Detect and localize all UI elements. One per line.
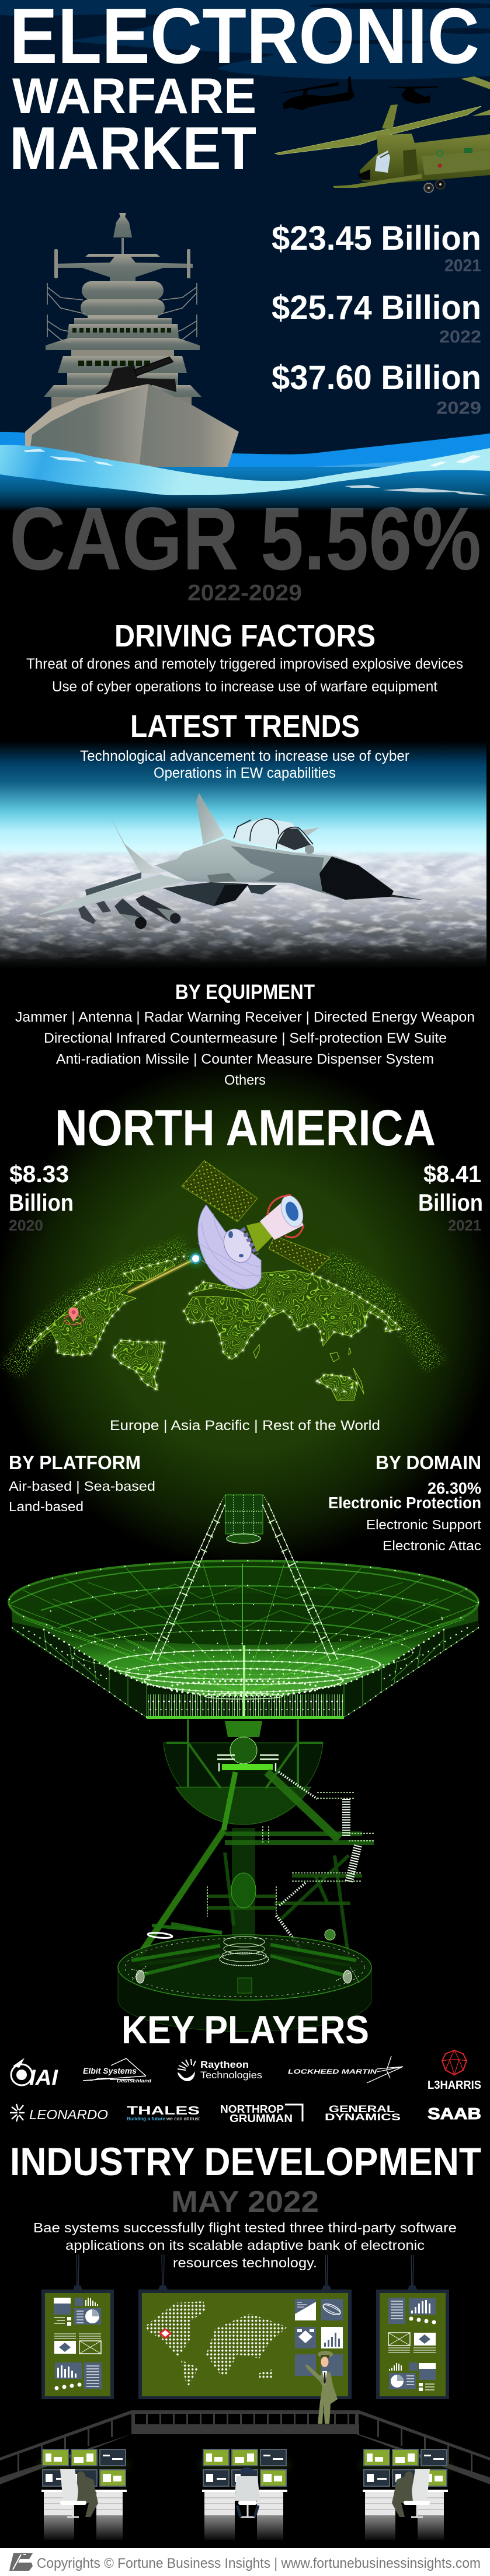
- logo: IAI: IAI: [29, 2065, 58, 2089]
- tower frame: [136, 1772, 374, 1965]
- by equipment: Jammer | Antenna | Radar Warning Receiver | Directed Energy Weapon: [15, 1009, 475, 1025]
- wing: [40, 875, 187, 915]
- by domain: [328, 1452, 482, 1553]
- market size figures: 2021: [444, 256, 481, 275]
- sea: lighter blue band: [225, 461, 412, 490]
- market size figures: $25.74 Billion: [272, 289, 481, 327]
- logo: Thales: Building a future: [127, 2116, 166, 2121]
- by equipment: BY EQUIPMENT: [175, 981, 315, 1004]
- centre workstation: [198, 2449, 291, 2540]
- footer bar: [0, 2548, 490, 2576]
- industry development heading: [10, 2140, 481, 2219]
- north america heading: NORTH AMERICA: [55, 1100, 436, 1156]
- location pin: [64, 1308, 83, 1324]
- logo: Raytheon Technologies: Technologies: [200, 2070, 262, 2081]
- clouds: [0, 0, 490, 79]
- satellite: [182, 1161, 330, 1289]
- north america 2020 value: Billion: [9, 1189, 74, 1216]
- panel: sky and fighter jet: [0, 735, 490, 969]
- logo: Leonardo: [10, 2104, 108, 2122]
- sea: deep blue: [0, 432, 490, 484]
- logo: Elbit Systems: Deutschland: [117, 2078, 152, 2084]
- by domain: Electronic Support: [366, 1517, 482, 1532]
- industry development text: applications on its scalable adaptive bank of electronic: [65, 2238, 425, 2253]
- foreground helicopter silhouettes: [276, 76, 438, 110]
- north america 2020 value: $8.33: [9, 1161, 69, 1187]
- centre operator: [234, 2467, 260, 2517]
- stairs: [276, 1772, 358, 1947]
- ground base disc: [118, 1925, 371, 2032]
- footer logo: [9, 2553, 33, 2571]
- market size figures: 2029: [436, 399, 481, 418]
- fighter jet: [40, 793, 426, 929]
- by platform: [9, 1452, 155, 1514]
- latest trends: Operations in EW capabilities: [154, 765, 336, 781]
- driving factors: DRIVING FACTORS: [114, 618, 376, 653]
- cloud texture: [0, 852, 486, 963]
- logo row one: [11, 2050, 481, 2092]
- driving factors: [26, 618, 463, 695]
- logo: L3Harris: [428, 2050, 481, 2092]
- north america 2021 value: [418, 1161, 483, 1234]
- by platform: BY PLATFORM: [9, 1452, 141, 1473]
- control room: [0, 2255, 490, 2540]
- north america 2021 value: Billion: [418, 1189, 483, 1216]
- logo: Thales: THALES: [127, 2105, 200, 2117]
- by domain: 26.30%: [428, 1479, 481, 1497]
- logo: L3Harris: L3HARRIS: [428, 2079, 481, 2092]
- deck gun: [91, 357, 176, 399]
- foam flecks: [23, 449, 490, 495]
- underwing missiles: [78, 895, 182, 929]
- world contour map: [30, 1260, 402, 1400]
- market size figures: $23.45 Billion: [272, 219, 481, 257]
- left workstation: [37, 2449, 131, 2540]
- logo: Northrop Grumman: NORTHROP: [220, 2103, 284, 2115]
- logo: General Dynamics: GENERAL: [329, 2103, 395, 2114]
- by domain: Electronic Protection: [328, 1494, 481, 1512]
- logo: Elbit Systems: [83, 2058, 152, 2084]
- market size figures: $37.60 Billion: [272, 359, 481, 397]
- panel: regional map glow: [0, 1056, 490, 1558]
- rim and face nodes: [9, 1561, 478, 1717]
- title: [9, 0, 479, 183]
- right workstation: [359, 2449, 452, 2540]
- other regions: Europe | Asia Pacific | Rest of the World: [110, 1418, 380, 1434]
- logo: Northrop Grumman: GRUMMAN: [230, 2113, 293, 2124]
- sea: pale foam wave: [0, 445, 490, 495]
- latest trends: [80, 709, 409, 781]
- particle scatter: [0, 1233, 450, 1381]
- sea: lower fade into black: [0, 467, 490, 512]
- title: MARKET: [9, 115, 256, 183]
- industry development heading: MAY 2022: [171, 2185, 319, 2219]
- driving factors: Use of cyber operations to increase use of warfare equipment: [52, 679, 437, 695]
- glowing city lights: [30, 1256, 402, 1392]
- logo: Northrop Grumman: [220, 2103, 303, 2124]
- title: WARFARE: [12, 68, 256, 124]
- officer presenting: [305, 2351, 338, 2424]
- helicopter: olive transport: [274, 76, 490, 193]
- by equipment: Anti-radiation Missile | Counter Measure Dispenser System: [56, 1051, 434, 1067]
- north america 2020 value: [9, 1161, 74, 1234]
- by domain: Electronic Attac: [383, 1538, 481, 1553]
- north america 2020 value: 2020: [9, 1217, 43, 1234]
- by platform: Air-based | Sea-based: [9, 1479, 155, 1494]
- signal beam: [128, 1259, 196, 1292]
- CAGR headline: 2022-2029: [187, 581, 302, 606]
- balcony railing: [0, 2410, 490, 2484]
- hanging screen mounts: [77, 2255, 413, 2286]
- logo: Lockheed Martin: LOCKHEED MARTIN: [288, 2068, 377, 2075]
- radar dish wireframe: [9, 1495, 479, 2032]
- market size figures: [272, 219, 481, 418]
- lower dish truss: [12, 1621, 479, 1718]
- latest trends: LATEST TRENDS: [130, 709, 360, 744]
- industry development text: resources technology.: [173, 2255, 317, 2270]
- logo: Raytheon Technologies: [178, 2059, 262, 2081]
- left operator: [60, 2469, 98, 2517]
- logo: Saab: SAAB: [428, 2105, 481, 2123]
- logo: General Dynamics: [325, 2103, 401, 2123]
- driving factors: Threat of drones and remotely triggered improvised explosive devices: [26, 656, 463, 672]
- by equipment: Directional Infrared Countermeasure | Self-protection EW Suite: [44, 1030, 447, 1046]
- logo: Lockheed Martin: [288, 2056, 403, 2083]
- upper floor: [225, 1834, 374, 1843]
- latest trends: Technological advancement to increase use of cyber: [80, 748, 409, 764]
- north america 2021 value: $8.41: [423, 1161, 481, 1187]
- radar wires: [47, 283, 197, 342]
- key players heading: KEY PLAYERS: [121, 2008, 369, 2052]
- by equipment: [15, 981, 475, 1088]
- market size figures: 2022: [439, 327, 481, 347]
- logo: Leonardo: LEONARDO: [29, 2107, 108, 2122]
- industry development text: [33, 2220, 457, 2270]
- right operator: [392, 2469, 430, 2517]
- industry development text: Bae systems successfully flight tested three third-party software: [33, 2220, 457, 2235]
- warship: [25, 213, 239, 484]
- by domain: BY DOMAIN: [376, 1452, 481, 1473]
- by platform: Land-based: [9, 1499, 84, 1514]
- logo: General Dynamics: DYNAMICS: [325, 2112, 401, 2123]
- central world map screen: [138, 2290, 352, 2399]
- by equipment: Others: [224, 1072, 266, 1088]
- north america 2021 value: 2021: [448, 1217, 481, 1234]
- feed tower: [150, 1495, 338, 1661]
- logo: Thales: [127, 2105, 200, 2121]
- logo: Raytheon Technologies: Raytheon: [200, 2059, 249, 2070]
- right wall screen: [376, 2290, 449, 2399]
- logo: IAI: [11, 2058, 58, 2089]
- dark cloud streaks: [310, 2, 490, 44]
- logo row two: [10, 2103, 481, 2124]
- dish bowl: [9, 1561, 478, 1719]
- left wall screen: [41, 2290, 114, 2399]
- mount and yoke: [164, 1719, 323, 1824]
- logo: Thales: we can all trust: [166, 2116, 200, 2121]
- ship hull: [25, 384, 239, 484]
- logo: Elbit Systems: Elbit Systems: [83, 2066, 137, 2075]
